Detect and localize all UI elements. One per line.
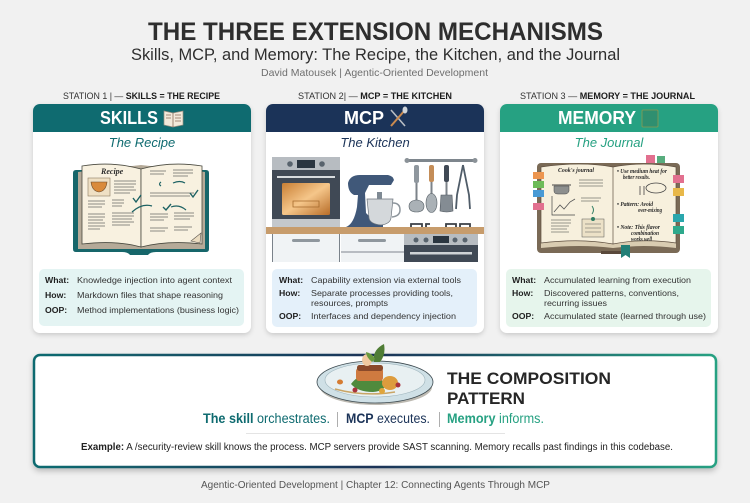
right tabs bbox=[673, 175, 684, 183]
range bbox=[404, 234, 478, 262]
icon: recipe book: Recipe bbox=[100, 167, 124, 176]
memory header bbox=[500, 104, 718, 132]
utensil rack bbox=[404, 158, 478, 212]
mcp info panel: Separate processes providing tools, bbox=[311, 288, 453, 298]
subtitle: Skills, MCP, and Memory: The Recipe, the Kitchen, and the Journal bbox=[131, 45, 620, 64]
panel: composition pattern bbox=[34, 344, 716, 467]
icon: plated dish bbox=[317, 344, 433, 405]
memory info panel: What: bbox=[512, 275, 536, 285]
mcp info panel: resources, prompts bbox=[311, 298, 389, 308]
memory header: MEMORY bbox=[558, 108, 636, 128]
countertop bbox=[266, 227, 484, 234]
mcp subtitle: The Kitchen bbox=[340, 135, 410, 150]
left tabs bbox=[533, 172, 544, 179]
journal right page text: • Use medium heat for bbox=[617, 168, 667, 175]
station label 1: STATION 1 | — SKILLS = THE RECIPE bbox=[63, 91, 220, 101]
skills info panel: Markdown files that shape reasoning bbox=[77, 290, 223, 300]
journal left page text: Cook's journal bbox=[558, 167, 594, 174]
mcp info panel: How: bbox=[279, 288, 300, 298]
top tabs bbox=[646, 155, 655, 164]
journal right page text bbox=[617, 168, 667, 243]
memory info panel: Accumulated learning from execution bbox=[544, 275, 691, 285]
title: THE THREE EXTENSION MECHANISMS bbox=[148, 18, 603, 46]
composition tagline bbox=[203, 411, 544, 427]
memory info panel: recurring issues bbox=[544, 298, 608, 308]
journal right page text: combination bbox=[631, 230, 659, 237]
mcp info panel: What: bbox=[279, 275, 303, 285]
journal right page text: better results. bbox=[623, 174, 650, 181]
composition tagline: MCP executes. bbox=[346, 411, 430, 426]
card background bbox=[33, 104, 251, 333]
memory info panel: Accumulated state (learned through use) bbox=[544, 311, 706, 321]
card background bbox=[266, 104, 484, 333]
composition heading bbox=[447, 369, 611, 408]
cover bbox=[537, 163, 680, 253]
icon: kitchen bbox=[266, 157, 484, 262]
skills info panel: OOP: bbox=[45, 305, 67, 315]
composition heading: PATTERN bbox=[447, 389, 525, 408]
skills info panel: Method implementations (business logic) bbox=[77, 305, 239, 315]
composition tagline: The skill orchestrates. bbox=[203, 411, 330, 426]
journal right page text: • Pattern: Avoid bbox=[617, 201, 654, 208]
memory info panel bbox=[506, 269, 711, 327]
mcp header: MCP bbox=[344, 108, 384, 128]
memory info panel: Discovered patterns, conventions, bbox=[544, 288, 679, 298]
composition tagline: Memory informs. bbox=[447, 411, 544, 426]
card background bbox=[500, 104, 718, 333]
mcp header bbox=[266, 104, 484, 132]
skills header: SKILLS bbox=[100, 108, 158, 128]
station label 2: STATION 2| — MCP = THE KITCHEN bbox=[298, 91, 452, 101]
skills info panel: How: bbox=[45, 290, 66, 300]
skills info panel: Knowledge injection into agent context bbox=[77, 275, 233, 285]
icon: journal bbox=[533, 155, 684, 258]
memory subtitle: The Journal bbox=[575, 135, 644, 150]
author line: David Matousek | Agentic-Oriented Development bbox=[261, 67, 488, 79]
icon: recipe book bbox=[73, 164, 209, 255]
mcp info panel: Interfaces and dependency injection bbox=[311, 311, 456, 321]
memory info panel: OOP: bbox=[512, 311, 534, 321]
skills subtitle: The Recipe bbox=[109, 135, 175, 150]
skills info panel: What: bbox=[45, 275, 69, 285]
spine and bookmark bbox=[601, 251, 625, 254]
mcp info panel: OOP: bbox=[279, 311, 301, 321]
panel: skills bbox=[33, 104, 251, 333]
composition box bbox=[34, 355, 716, 467]
footer: Agentic-Oriented Development | Chapter 12: Connecting Agents Through MCP bbox=[201, 480, 550, 491]
wall oven bbox=[272, 157, 340, 227]
memory info panel: How: bbox=[512, 288, 533, 298]
journal right page text: works well bbox=[631, 236, 652, 243]
composition example: Example: A /security-review skill knows the process. MCP servers provide SAST scanning. Memory recalls past findings in this codebase. bbox=[81, 442, 673, 453]
burners bbox=[411, 224, 470, 227]
mcp info panel bbox=[272, 269, 477, 327]
mcp info panel: Capability extension via external tools bbox=[311, 275, 462, 285]
station label 3: STATION 3 — MEMORY = THE JOURNAL bbox=[520, 91, 696, 101]
composition heading: THE COMPOSITION bbox=[447, 369, 611, 388]
panel: memory bbox=[500, 104, 718, 333]
journal right page text: • Note: This flavor bbox=[617, 224, 660, 231]
panel: mcp bbox=[266, 104, 484, 333]
skills info panel bbox=[39, 269, 244, 326]
cabinets bbox=[272, 234, 404, 262]
stand mixer bbox=[346, 175, 400, 227]
skills header bbox=[33, 104, 251, 132]
journal right page text: over-mixing bbox=[638, 207, 662, 214]
